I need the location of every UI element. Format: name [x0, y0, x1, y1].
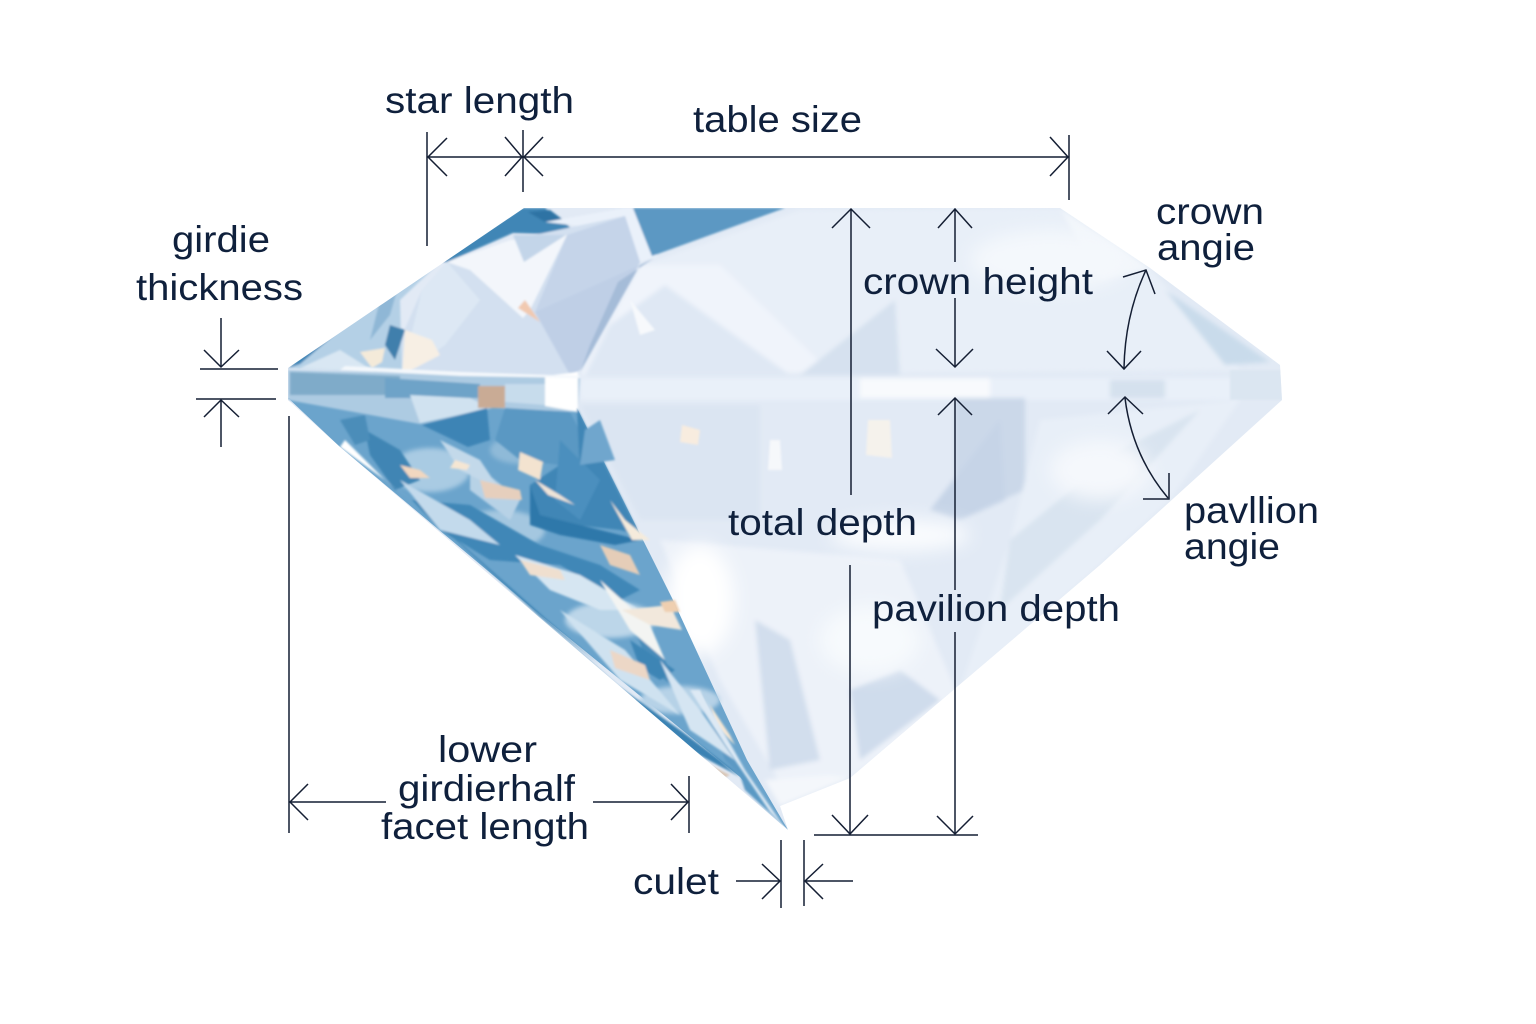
small highlights [630, 300, 892, 470]
arrow: crown angle [1107, 270, 1155, 369]
label: crown angle: crown [1156, 191, 1264, 232]
label: girdle thickness: girdie [172, 219, 270, 260]
arrow: pavilion depth [814, 398, 978, 835]
pale strip along blue facet edge [690, 690, 785, 828]
label: pavilion angle [1184, 490, 1319, 567]
label: star length: star length [385, 80, 574, 121]
label: crown angle [1156, 191, 1264, 268]
label: pavilion depth: pavilion depth [872, 588, 1120, 629]
label: pavilion angle: angie [1184, 526, 1280, 567]
arrow: girdle thickness [196, 318, 278, 447]
label: crown angle: angie [1157, 227, 1255, 268]
arrow: lower girdle half facet length [289, 416, 689, 833]
light patches [339, 439, 392, 485]
label: crown height: crown height [863, 261, 1094, 302]
arrow: pavilion angle [1108, 397, 1169, 499]
label: girdle thickness [136, 219, 303, 308]
right crown and pavilion soft facets [580, 208, 1270, 806]
label: lower girdle half facet length [381, 729, 589, 847]
blue pavilion facet [288, 398, 788, 830]
label: culet: culet [633, 861, 720, 902]
diamond illustration [288, 208, 1282, 830]
label: pavilion angle: pavllion [1184, 490, 1319, 531]
right girdle [1230, 370, 1282, 400]
label: lower girdle half facet length: facet length [381, 806, 589, 847]
arrow: star length and table size dimension [427, 130, 1069, 246]
label: lower girdle half facet length: lower [438, 729, 537, 770]
dark patches [422, 408, 490, 447]
arrow: crown height [936, 209, 973, 367]
diamond body [288, 208, 1282, 830]
girdle band [288, 370, 580, 424]
label: girdle thickness: thickness [136, 267, 303, 308]
arrow: total depth [832, 209, 870, 834]
label: lower girdle half facet length: girdierhalf [398, 768, 576, 809]
crown left facets [288, 208, 785, 378]
label: total depth: total depth [728, 502, 917, 543]
arrow: culet [736, 840, 853, 908]
warm glints [518, 452, 543, 480]
label: table size: table size [693, 99, 862, 140]
